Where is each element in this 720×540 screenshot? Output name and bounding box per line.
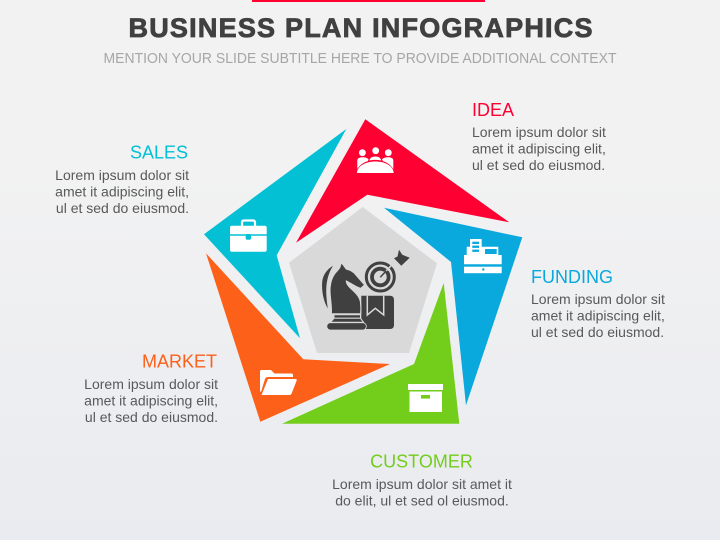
subtitle: MENTION YOUR SLIDE SUBTITLE HERE TO PROVIDE ADDITIONAL CONTEXT xyxy=(104,51,617,67)
icon: folder xyxy=(260,370,297,395)
text block: funding: ul et sed do eiusmod. xyxy=(531,324,664,340)
box with ribbon xyxy=(361,296,394,329)
text block: market: MARKET xyxy=(142,352,217,372)
target xyxy=(366,263,394,291)
text block: customer: Lorem ipsum dolor sit amet it xyxy=(332,476,512,492)
text block: funding xyxy=(531,267,665,340)
text block: customer: do elit, ul et sed ol eiusmod. xyxy=(335,492,509,508)
text block: customer xyxy=(332,452,512,508)
text block: idea: amet it adipiscing elit, xyxy=(472,140,606,156)
text block: market: Lorem ipsum dolor sit xyxy=(84,376,218,392)
text block: sales: ul et sed do eiusmod. xyxy=(56,200,189,216)
pentagon segment: sales xyxy=(204,129,346,338)
text block: funding: FUNDING xyxy=(531,267,613,287)
pentagon segment: funding xyxy=(384,208,522,405)
text block: idea: ul et sed do eiusmod. xyxy=(472,157,605,173)
knight xyxy=(322,262,366,330)
text block: funding: amet it adipiscing elit, xyxy=(531,308,665,324)
icon: team meeting xyxy=(357,147,394,173)
center pentagon xyxy=(289,207,437,353)
pentagon segment: idea xyxy=(296,119,509,243)
text block: idea: Lorem ipsum dolor sit xyxy=(472,124,606,140)
text block: customer: CUSTOMER xyxy=(370,452,473,472)
arrow fletching xyxy=(394,250,410,266)
text block: market: amet it adipiscing elit, xyxy=(84,392,218,408)
text block: idea: IDEA xyxy=(472,100,514,120)
icon: briefcase xyxy=(230,220,267,252)
text block: sales xyxy=(55,142,189,216)
top accent bar xyxy=(252,0,485,2)
title: BUSINESS PLAN INFOGRAPHICS xyxy=(128,13,592,43)
text block: idea xyxy=(472,100,606,173)
icon: cash register xyxy=(464,239,502,273)
text block: funding: Lorem ipsum dolor sit xyxy=(531,291,665,307)
pentagon segment: market xyxy=(206,253,390,422)
pentagon segment: customer xyxy=(282,283,459,424)
text block: market: ul et sed do eiusmod. xyxy=(85,409,218,425)
text block: sales: amet it adipiscing elit, xyxy=(55,184,189,200)
text block: sales: SALES xyxy=(130,142,188,162)
text block: sales: Lorem ipsum dolor sit xyxy=(55,167,189,183)
icon: chess knight and target xyxy=(322,250,410,330)
text block: market xyxy=(84,352,218,425)
icon: storage box xyxy=(408,384,443,412)
